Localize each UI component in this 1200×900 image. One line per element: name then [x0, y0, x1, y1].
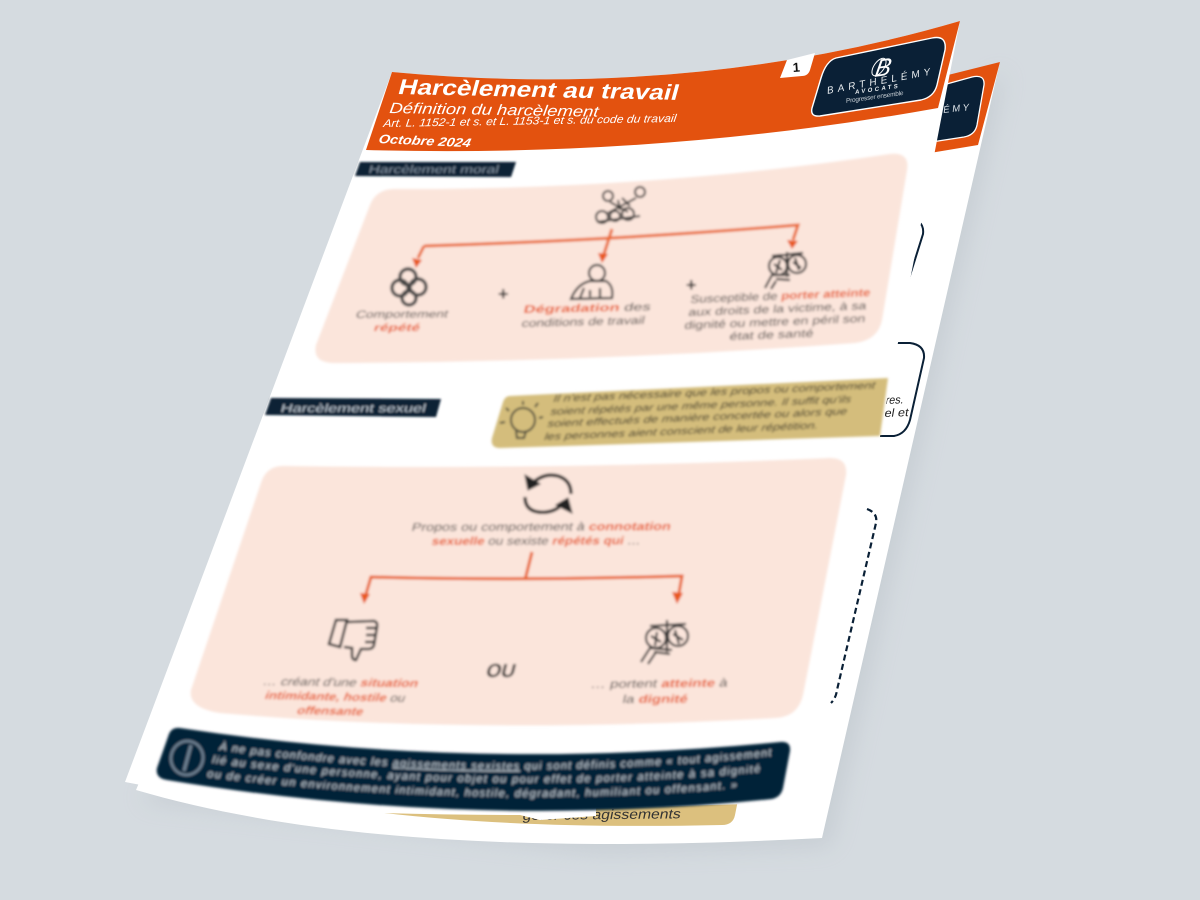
gold strip text: gérer ces agissements: [521, 806, 683, 823]
text: situation: … créant d'une situation: [261, 674, 421, 690]
note text: Il n'est pas nécessaire que les propos ou comportement: [552, 380, 878, 405]
back sheet text fragments: res.: [884, 393, 905, 407]
callout text: ou de créer un environnement intimidant, hostile, dégradant, humiliant ou offensant. »: [205, 768, 739, 802]
icon: scales with hand: [641, 620, 688, 664]
title: Harcèlement au travail: [396, 74, 682, 105]
icon: light bulb: [500, 401, 543, 438]
text: comportement répété: Comportement: [354, 309, 450, 321]
date: Octobre 2024: [377, 132, 472, 150]
callout text: [205, 738, 774, 802]
icon: refresh arrows: [525, 475, 572, 513]
logo tagline: Progresser ensemble: [846, 90, 904, 105]
back sheet text fragment 2: el et: [883, 406, 911, 420]
heading: harcèlement sexuel: [265, 398, 441, 417]
callout text: lié au sexe d'une personne, ayant pour objet ou pour effet de porter atteinte à sa dignité: [210, 753, 762, 788]
text: atteinte: [684, 287, 871, 343]
gold strip: [345, 800, 738, 826]
callout background: [157, 728, 790, 811]
text: propos: [410, 520, 672, 548]
plus sign 2: +: [686, 275, 697, 295]
heading: harcèlement moral: [355, 162, 516, 177]
navy callout: [154, 726, 792, 813]
text: dégradation: conditions de travail: [520, 315, 646, 330]
text: situation: offensante: [295, 703, 367, 718]
text: dégradation: Dégradation des: [522, 301, 653, 316]
panel background: [315, 154, 907, 363]
note background: [492, 378, 888, 448]
back sheet orange header: [920, 62, 1000, 153]
back sheet: [136, 62, 1000, 844]
icon: info circle: [167, 737, 207, 779]
text: atteinte: dignité ou mettre en péril son: [684, 313, 866, 332]
note text: soient effectués de manière concertée ou alors que: [546, 406, 849, 430]
text: atteinte: [589, 677, 730, 706]
note text: les personnes aient conscient de leur répétition.: [543, 421, 819, 443]
text: situation: [261, 674, 421, 718]
plus sign 1: +: [498, 284, 509, 304]
logo name: BARTHÉLÉMY: [827, 65, 931, 97]
legal references: Art. L. 1152-1 et s. et L. 1153-1 et s. du code du travail: [382, 113, 678, 130]
text: atteinte: état de santé: [729, 328, 814, 343]
text: propos: sexuelle ou sexiste répétés qui …: [430, 534, 642, 548]
text: situation: intimidante, hostile ou: [263, 688, 408, 705]
brace 2: [880, 343, 924, 436]
text: atteinte: Susceptible de porter atteinte: [690, 287, 871, 306]
logo background: [812, 38, 945, 116]
heading: harcèlement sexuel: Harcèlement sexuel: [279, 402, 427, 415]
front sheet: [125, 21, 960, 820]
page number tab: 1: [792, 60, 800, 75]
back sheet paper: [136, 62, 1000, 844]
callout text: À ne pas confondre avec les agissements sexistes qui sont définis comme « tout agissement: [216, 738, 774, 775]
logo block: [812, 38, 945, 116]
icon: person: [571, 265, 612, 299]
text: atteinte: aux droits de la victime, à sa: [688, 300, 868, 319]
arrowheads: [360, 592, 683, 604]
text: atteinte: la dignité: [621, 693, 690, 706]
note text: soient répétés par une même personne. Il suffit qu'ils: [549, 394, 852, 418]
gold note: [492, 378, 888, 448]
panel background: [191, 458, 846, 725]
logo monogram: B: [873, 54, 894, 83]
front sheet paper: [125, 21, 960, 820]
heading: harcèlement moral: Harcèlement moral: [367, 164, 500, 176]
text: atteinte: … portent atteinte à: [589, 677, 730, 691]
text: ou: OU: [484, 661, 518, 682]
subtitle: Définition du harcèlement: [389, 100, 601, 121]
arrows: three branches: [418, 225, 798, 258]
panel: harcèlement moral: [315, 154, 907, 363]
page number tab: [780, 53, 815, 78]
icon: repeat knot: [392, 269, 426, 305]
dashed brace: [831, 509, 876, 703]
arrowheads: [412, 240, 798, 268]
arrows: two branches: [366, 552, 682, 594]
icon: thumbs down: [329, 620, 377, 660]
back sheet logo text: ÉMY: [943, 102, 970, 116]
logo avocats: AVOCATS: [855, 84, 898, 96]
text: comportement répété: répété: [372, 322, 422, 334]
note text: [543, 380, 878, 443]
text: comportement répété: [354, 309, 450, 334]
sheet shadow: [140, 70, 1005, 852]
icon: scales with hand: [765, 252, 806, 289]
text: propos: Propos ou comportement à connotation: [410, 520, 672, 534]
panel: harcèlement sexuel: [191, 458, 846, 725]
orange header: [366, 21, 960, 151]
icon: network of people: [596, 187, 645, 223]
back sheet logo: [925, 76, 984, 143]
brace 1: [907, 222, 923, 285]
text: dégradation: [520, 301, 653, 330]
